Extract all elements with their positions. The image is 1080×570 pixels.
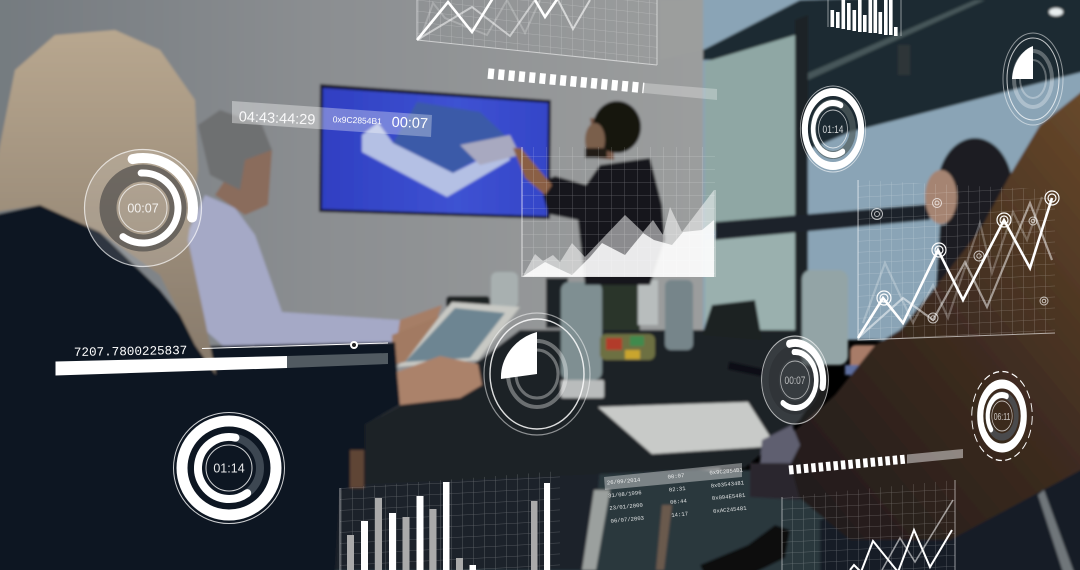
table rows: 26/09/2014: [607, 476, 641, 486]
seated person's leg: [350, 450, 364, 488]
timer ring: left 00:07: 00:07: [127, 202, 159, 216]
timer ring: lower right 00:07: [762, 336, 828, 424]
timecode values: 0x9C2854B1: [333, 114, 382, 126]
presenter: [513, 101, 665, 285]
checked shirt cuff: [750, 425, 800, 500]
slider line with marker: [202, 342, 388, 348]
bar chart: top right: [828, 0, 901, 36]
timer ring: top right 01:14: 01:14: [823, 124, 844, 136]
table rows: [607, 466, 748, 525]
timer ring: right 06:11: [972, 372, 1032, 460]
right woman: [845, 138, 1013, 375]
faint series: [863, 197, 1042, 323]
bar chart: bottom left: [340, 471, 560, 570]
table rows: 0xAC245481: [713, 505, 748, 515]
timer ring: left 00:07: [84, 149, 202, 267]
timer ring: lower right 00:07: 00:07: [785, 375, 805, 387]
grey series: [858, 203, 1052, 338]
man in shirt: [180, 110, 404, 352]
progress bar: left: [56, 353, 388, 376]
table rows: 14:17: [671, 510, 688, 519]
table header band: [604, 463, 742, 490]
floor: [330, 470, 1080, 570]
timecode values: [238, 108, 428, 133]
line chart: top centre: [417, 0, 657, 65]
table rows: 31/08/1996: [608, 489, 642, 499]
bottles and objects on table: [446, 270, 848, 398]
table legs: [582, 490, 610, 570]
pie gauge: centre: [484, 313, 590, 435]
TV: [319, 84, 551, 219]
ring markers: [872, 191, 1059, 323]
white paper: [598, 402, 776, 454]
table rows: 23/01/2000: [609, 502, 644, 512]
area chart: centre: [522, 147, 715, 277]
table rows: 00:07: [667, 472, 685, 481]
table rows: 0x9C2854B1: [709, 466, 744, 477]
line chart: bottom right: [782, 480, 955, 570]
main series: [858, 198, 1052, 338]
wall: [0, 0, 720, 570]
man in brown jacket: [790, 85, 1080, 540]
timer ring: top right 01:14: [800, 86, 866, 172]
line chart: right: [858, 180, 1059, 340]
table rows: 02:31: [669, 485, 687, 494]
table rows: 0x03543481: [710, 479, 745, 490]
timecode values: 00:07: [391, 115, 428, 132]
striped progress bar: top: [488, 74, 717, 100]
under-table shadow: [335, 470, 600, 570]
table rows: 06:44: [670, 497, 688, 506]
table rows: 06/07/2003: [610, 515, 644, 525]
timecode values: 04:43:44:29: [238, 109, 316, 128]
right window wall: [660, 0, 1080, 340]
resting hand: [397, 356, 482, 405]
striped progress bar: bottom right: [789, 449, 963, 470]
navy lower right: [820, 440, 1080, 570]
table rows: 0x094E5481: [712, 492, 746, 502]
timer ring: right 06:11: 06:11: [994, 411, 1010, 422]
pie gauge: top right: [1003, 33, 1063, 125]
shoe: [700, 525, 790, 570]
readout value: 7207.7800225837: [74, 344, 187, 360]
bottom right chair strut: [1038, 490, 1075, 570]
blonde woman hair: [0, 30, 216, 375]
blonde woman blazer: [0, 205, 400, 570]
timer ring: bottom left 01:14: [174, 412, 284, 524]
tag: timecode: [232, 101, 432, 137]
timer ring: bottom left 01:14: 01:14: [213, 462, 245, 476]
table: [365, 330, 825, 484]
data table: [604, 463, 748, 525]
tablet and hands: [392, 302, 520, 367]
